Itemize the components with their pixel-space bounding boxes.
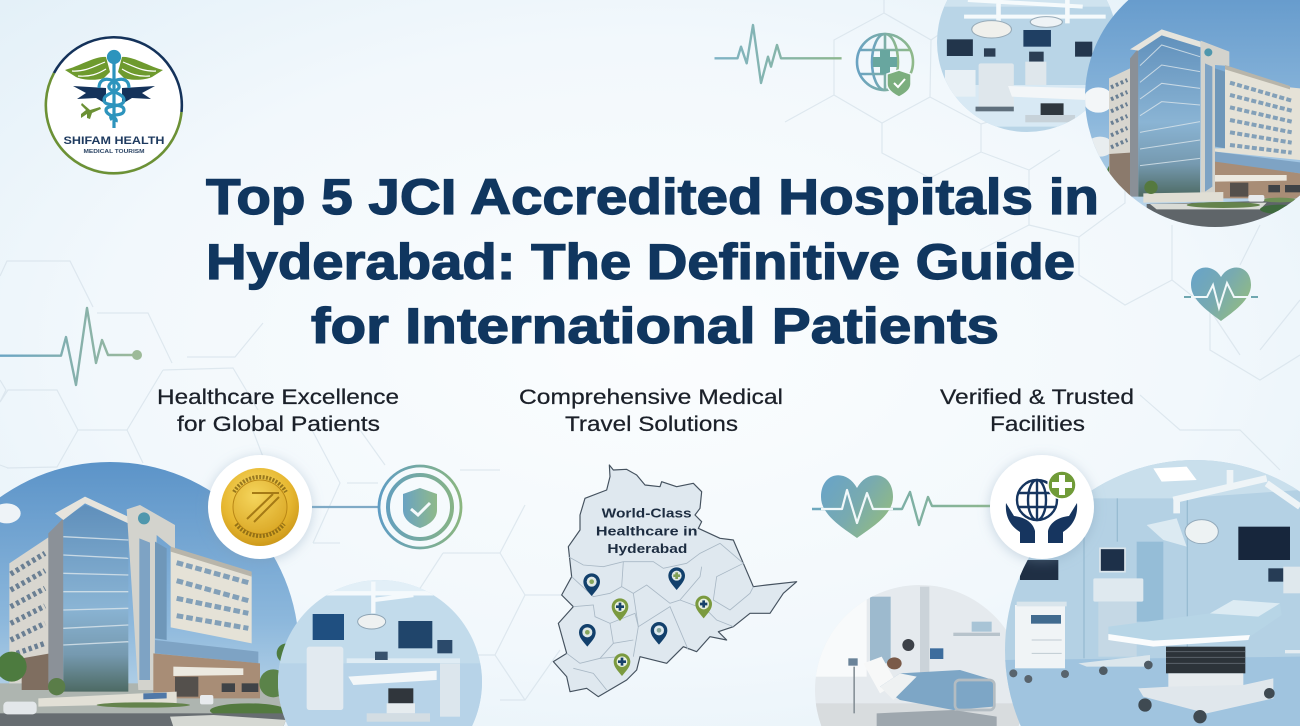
subheading: healthcare excellence: for Global Patients [177,412,380,436]
top-right hospital building photo [1080,0,1300,233]
subheading: medical travel: Comprehensive Medical [519,385,783,409]
map label: Hyderabad [607,541,687,556]
subheading: healthcare excellence [157,385,399,436]
icon: heart with pulse lower [812,475,990,538]
bed ward photo [815,585,1020,726]
title: Hyderabad: The Definitive Guide [206,234,1075,290]
title: Top 5 JCI Accredited Hospitals in [206,169,1099,225]
icon: shield in rings [379,466,461,548]
subheading: verified facilities [940,385,1134,436]
logo tagline: MEDICAL TOURISM [84,149,145,155]
title [206,169,1099,354]
large operating room photo [1000,450,1300,726]
bottom operating room photo [278,580,482,726]
map label: World-Class [602,505,692,520]
subheading: verified facilities: Verified & Trusted [940,385,1134,409]
top-right operating room photo [937,0,1114,132]
bottom-left hospital building photo [0,460,320,726]
map pins [579,567,712,676]
logo caduceus [99,52,129,128]
map of Telangana [553,465,797,697]
JCI gold seal badge [208,455,312,559]
logo: Shifam Health [46,37,182,173]
subheading: medical travel: Travel Solutions [565,412,738,436]
map label [596,505,697,556]
title: for International Patients [311,298,999,354]
logo wings [65,57,163,80]
subheading: verified facilities: Facilities [990,412,1085,436]
globe in hands badge [990,455,1094,559]
logo airplane [81,103,101,119]
icon: globe with shield [857,34,913,97]
subheading: healthcare excellence: Healthcare Excellence [157,385,399,409]
icon: heart with pulse right [1184,268,1258,321]
logo wings navy [73,86,155,104]
connector line [312,506,380,508]
icon: top pulse line [714,25,842,83]
logo name: SHIFAM HEALTH [64,135,165,147]
subheading: medical travel [519,385,783,436]
icon: left pulse line [0,308,142,385]
map label: Healthcare in [596,524,697,539]
